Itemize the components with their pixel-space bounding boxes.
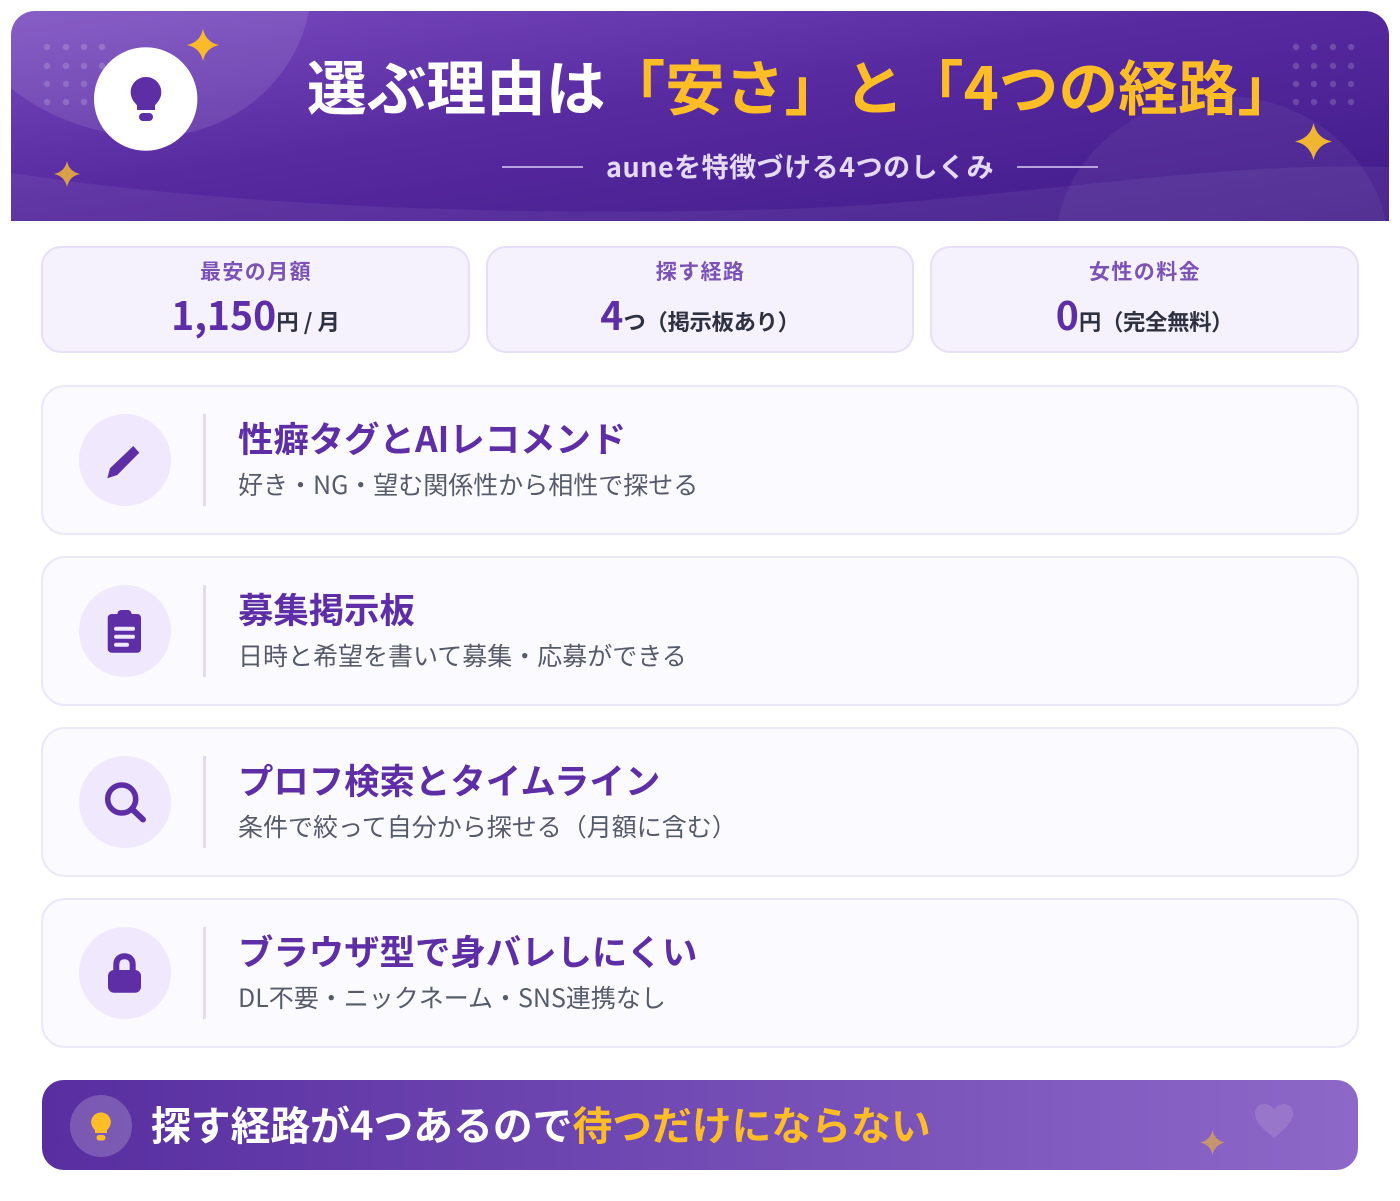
panel: browser based privacy <box>41 898 1359 1048</box>
icon: header lightbulb <box>94 47 198 151</box>
callout text: 探す経路が4つあるので待つだけにならない <box>151 1095 931 1152</box>
heading: プロフ検索とタイムライン <box>238 754 660 805</box>
heading: ブラウザ型で身バレしにくい <box>238 925 697 976</box>
panel: fetish tags and AI recommend <box>41 385 1359 535</box>
stat: women's fee <box>930 246 1359 353</box>
stat: lowest monthly price: 1,150円 / 月 <box>171 286 340 342</box>
icon: clipboard <box>79 585 171 677</box>
panel: profile search and timeline <box>41 727 1359 877</box>
description: 日時と希望を書いて募集・応募ができる <box>238 637 687 673</box>
heading: 性癖タグとAIレコメンド <box>238 412 626 463</box>
stat: lowest monthly price: 最安の月額 <box>200 256 312 286</box>
subtitle with side rules: auneを特徴づける4つのしくみ <box>606 146 994 185</box>
icon: padlock <box>79 927 171 1019</box>
stat: search routes: 4つ（掲示板あり） <box>600 286 800 342</box>
icon: pencil <box>79 414 171 506</box>
description: 条件で絞って自分から探せる（月額に含む） <box>238 808 737 844</box>
icon: heart <box>1255 1104 1293 1138</box>
header banner <box>11 11 1389 221</box>
stat: lowest monthly price <box>41 246 470 353</box>
icon: magnifier <box>79 756 171 848</box>
icon: sparkle top <box>187 29 219 61</box>
stat: women's fee: 0円（完全無料） <box>1056 286 1233 342</box>
stat: search routes <box>486 246 914 353</box>
icon: sparkle right <box>1295 123 1332 160</box>
stat: women's fee: 女性の料金 <box>1089 256 1201 286</box>
icon: sparkle <box>1200 1130 1225 1155</box>
description: 好き・NG・望む関係性から相性で探せる <box>238 466 698 502</box>
description: DL不要・ニックネーム・SNS連携なし <box>238 979 666 1015</box>
stat: search routes: 探す経路 <box>656 256 745 286</box>
icon: sparkle lower left <box>54 161 80 187</box>
callout banner <box>42 1080 1358 1170</box>
title: 選ぶ理由は「安さ」と「4つの経路」 <box>307 42 1297 128</box>
heading: 募集掲示板 <box>238 583 415 634</box>
icon: callout lightbulb <box>70 1095 132 1157</box>
panel: recruitment board <box>41 556 1359 706</box>
